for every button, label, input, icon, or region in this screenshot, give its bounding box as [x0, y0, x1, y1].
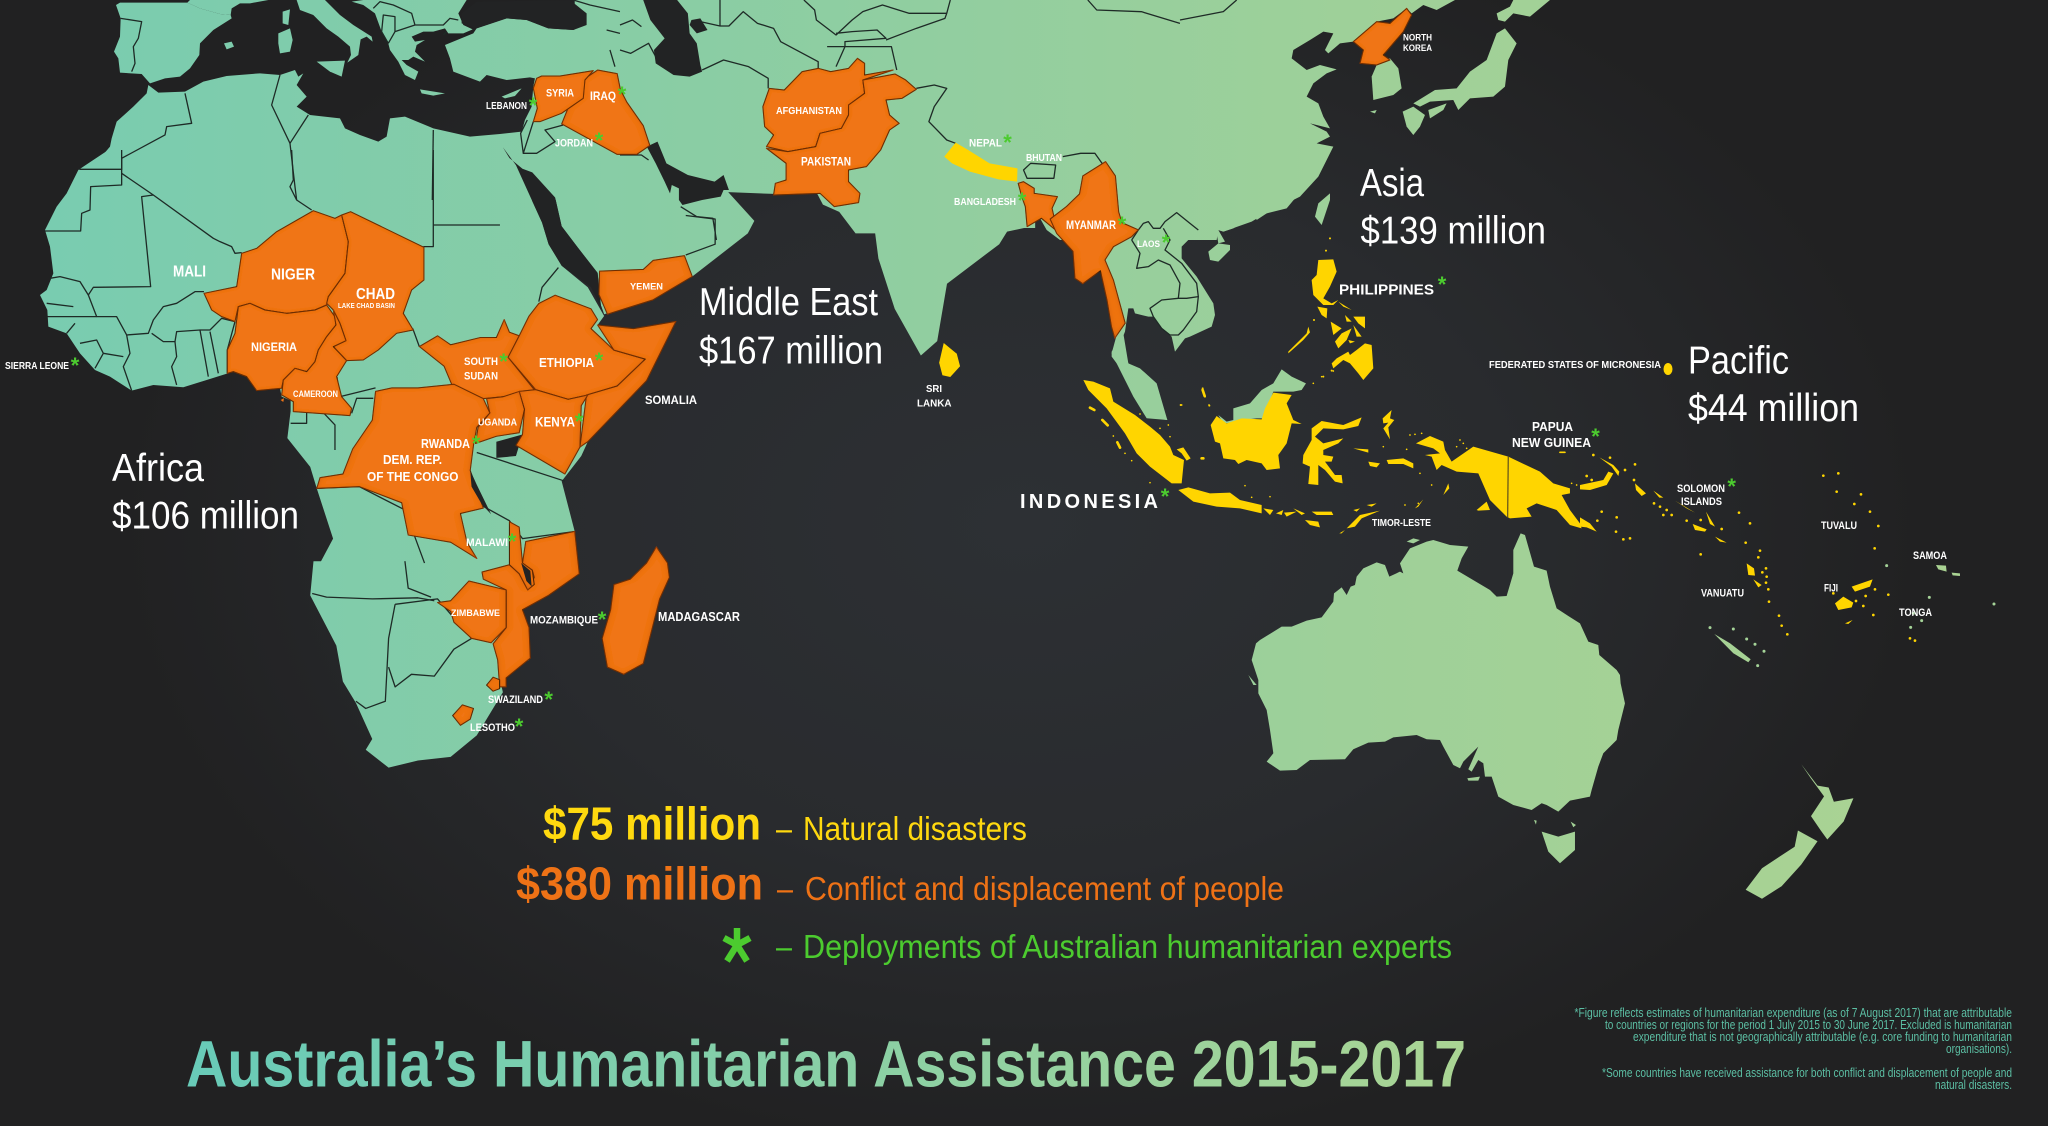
- borders: Mongolia and China: [1180, 0, 1237, 20]
- labels: Middle East: LEBANON: [486, 101, 527, 112]
- sea: Red Sea: [503, 147, 604, 314]
- labels: Africa: [5, 264, 740, 734]
- lake: Tanganyika: [470, 470, 491, 514]
- map: land masses: [40, 0, 1994, 899]
- labels: Africa: SUDAN: [464, 371, 498, 383]
- country: Federated States of Micronesia: [1664, 363, 1672, 375]
- map: deployment asterisks: *: [575, 409, 584, 434]
- footnotes: natural disasters.: [1935, 1078, 2012, 1092]
- labels: Africa: KENYA: [535, 414, 575, 430]
- map: deployment asterisks: *: [1003, 130, 1012, 155]
- map: deployment asterisks: *: [1591, 424, 1600, 449]
- labels: Pacific: FIJI: [1824, 583, 1838, 595]
- labels: Pacific: TUVALU: [1821, 520, 1857, 532]
- map: deployment asterisks: *: [1162, 230, 1171, 255]
- labels: Africa: MALI: [173, 264, 206, 280]
- labels: Africa: NIGERIA: [251, 340, 297, 354]
- icon: large green asterisk: [724, 928, 750, 961]
- labels: Africa: UGANDA: [478, 416, 517, 428]
- labels: Asia: BHUTAN: [1026, 152, 1062, 164]
- region total: Asia: $139 million: [1360, 210, 1546, 252]
- sea: Persian Gulf: [647, 142, 729, 205]
- borders: Indochina: [1132, 213, 1198, 335]
- land: New Zealand: [1746, 764, 1853, 899]
- region total: Africa: Africa: [112, 447, 204, 490]
- labels: Africa: SOUTH: [464, 356, 498, 368]
- borders: Middle East and Central Asia: [620, 0, 1180, 240]
- border: Papua line: [1507, 457, 1509, 517]
- map: natural disaster countries: [939, 143, 1915, 641]
- map: deployment asterisks: *: [598, 607, 607, 632]
- legend: conflict and displacement: –: [777, 870, 794, 907]
- labels: Africa: ZIMBABWE: [451, 608, 500, 619]
- legend: conflict and displacement: $380 million: [516, 858, 763, 910]
- legend: natural disasters: [543, 798, 1027, 850]
- country: Pacific islands: [1580, 455, 1915, 641]
- borders: West Africa: [45, 150, 500, 450]
- footnotes: organisations).: [1946, 1042, 2012, 1056]
- legend: conflict and displacement: [516, 858, 1284, 910]
- sea: Aral Sea: [690, 18, 707, 33]
- map: deployment asterisks: *: [1118, 212, 1127, 237]
- legend: conflict and displacement: Conflict and displacement of people: [805, 870, 1284, 907]
- land: West Africa: [40, 150, 353, 402]
- map: deployment asterisks: *: [508, 529, 517, 554]
- labels: Africa: ETHIOPIA: [539, 355, 595, 370]
- land: China and east Asia: [980, 0, 1455, 240]
- labels: Pacific: NEW GUINEA: [1512, 436, 1591, 450]
- labels: Africa: DEM. REP.: [383, 453, 442, 467]
- legend: expert deployments: –: [776, 928, 793, 965]
- map: deployment asterisks: *: [472, 431, 481, 456]
- labels: Asia: INDONESIA: [1020, 491, 1158, 513]
- labels: Asia: NEPAL: [969, 138, 1002, 150]
- labels: Middle East: JORDAN: [555, 138, 593, 150]
- region total: Middle East: $167 million: [699, 329, 883, 372]
- region total: Africa: $106 million: [112, 495, 299, 538]
- map: deployment asterisks: *: [515, 714, 524, 739]
- lake: Victoria: [496, 435, 522, 458]
- labels: Africa: MALAWI: [466, 537, 508, 549]
- map: deployment asterisks: *: [595, 128, 604, 153]
- country: Sri Lanka: [939, 343, 960, 377]
- map: deployment asterisks: *: [1018, 188, 1027, 213]
- map: country borders: [45, 0, 1237, 708]
- sea: Caspian Sea: [643, 0, 702, 77]
- legend: natural disasters: $75 million: [543, 798, 761, 850]
- borders: central and east Africa: [317, 268, 575, 563]
- country: Indonesia and Papua New Guinea: [1083, 371, 1582, 533]
- legend: expert deployments: Deployments of Australian humanitarian experts: [803, 928, 1452, 965]
- map: deployment asterisks: *: [1438, 272, 1447, 297]
- map: deployment asterisks: *: [1161, 484, 1170, 509]
- labels: Africa: MADAGASCAR: [658, 610, 740, 624]
- land: Hainan: [1208, 243, 1230, 262]
- land: Arabia, Iran, India: [522, 0, 1035, 356]
- land: Malay peninsula and Sabah: [1112, 333, 1306, 423]
- lake: Malawi: [521, 563, 532, 586]
- labels: Asia: MYANMAR: [1066, 220, 1117, 232]
- labels: Pacific: [1489, 359, 1947, 619]
- legend: natural disasters: Natural disasters: [803, 810, 1027, 847]
- labels: Africa: NIGER: [271, 266, 315, 284]
- map: deployment asterisks: *: [618, 82, 627, 107]
- labels: Africa: CAMEROON: [293, 389, 338, 399]
- country: Philippines: [1181, 238, 1373, 406]
- labels: Asia: LAOS: [1137, 239, 1160, 250]
- region total: Pacific: $44 million: [1688, 387, 1859, 430]
- legend: natural disasters: –: [776, 810, 793, 847]
- labels: Africa: MOZAMBIQUE: [530, 614, 598, 626]
- borders: southern Africa: [312, 561, 472, 708]
- countries: southern Africa: [438, 522, 669, 725]
- countries: South Asia: [763, 58, 1057, 232]
- labels: Pacific: PAPUA: [1532, 420, 1573, 434]
- map: deployment asterisks: *: [544, 687, 553, 712]
- footnotes: [1574, 1006, 2012, 1092]
- labels: Asia: BANGLADESH: [954, 197, 1016, 208]
- borders: North Africa and Levant: [121, 0, 620, 200]
- labels: Pacific: SOLOMON: [1677, 483, 1725, 495]
- labels: Middle East: [486, 88, 851, 292]
- labels: Middle East: AFGHANISTAN: [776, 105, 842, 117]
- labels: Pacific: FEDERATED STATES OF MICRONESIA: [1489, 359, 1661, 371]
- labels: Asia: SRI: [926, 384, 942, 395]
- country: North Korea: [1353, 8, 1412, 65]
- labels: Pacific: TONGA: [1899, 607, 1932, 619]
- labels: Pacific: SAMOA: [1913, 550, 1947, 562]
- country: Nepal: [944, 143, 1017, 182]
- labels: Africa: OF THE CONGO: [367, 470, 459, 484]
- country: Syria: [533, 71, 593, 122]
- map: deployment asterisks: *: [595, 348, 604, 373]
- labels: Africa: SOMALIA: [645, 393, 697, 407]
- labels: Asia: LANKA: [917, 398, 952, 410]
- land: Australia: [1248, 533, 1625, 863]
- labels: Middle East: IRAQ: [590, 89, 616, 103]
- map: inland seas and lakes: [462, 0, 729, 458]
- region total: Pacific: [1688, 340, 1859, 430]
- labels: Asia: KOREA: [1403, 43, 1432, 54]
- labels: Pacific: ISLANDS: [1681, 496, 1722, 508]
- labels: Africa: CHAD: [356, 286, 395, 303]
- map: conflict and displacement countries: [204, 8, 1412, 725]
- labels: Middle East: YEMEN: [630, 282, 663, 292]
- countries: other African and Middle East conflict countries: [317, 70, 692, 558]
- labels: Africa: RWANDA: [421, 437, 470, 451]
- land: Indochina and Thailand: [1060, 198, 1295, 420]
- region total: Pacific: Pacific: [1688, 340, 1789, 382]
- region total: Asia: Asia: [1360, 162, 1424, 205]
- labels: Asia: TIMOR-LESTE: [1372, 517, 1431, 529]
- map: deployment asterisks: *: [529, 93, 538, 118]
- labels: Africa: LAKE CHAD BASIN: [338, 301, 395, 310]
- labels: Asia: PHILIPPINES: [1339, 282, 1434, 298]
- borders: Oman and Yemen: [686, 215, 715, 255]
- map: country labels: [5, 33, 1947, 734]
- labels: Asia: [917, 33, 1434, 529]
- map: African lakes over countries: [470, 470, 532, 586]
- region total: Middle East: [699, 281, 883, 372]
- labels: Asia: NORTH: [1403, 33, 1432, 44]
- region total: Asia: [1360, 162, 1546, 252]
- title: Australia’s Humanitarian Assistance 2015-2017: [186, 1027, 1466, 1101]
- labels: Middle East: SYRIA: [546, 88, 574, 100]
- land: Korea, Japan, Taiwan: [1315, 0, 1550, 225]
- map: deployment asterisks: *: [499, 349, 508, 374]
- land: southern Africa: [310, 561, 578, 768]
- labels: Middle East: PAKISTAN: [801, 157, 851, 169]
- map: deployment asterisks: [71, 82, 1736, 739]
- map: deployment asterisks: *: [1727, 474, 1736, 499]
- sea: Black Sea: [462, 0, 587, 30]
- land: Europe and Mediterranean rim: [100, 0, 620, 200]
- labels: Africa: SWAZILAND: [488, 694, 543, 706]
- region total: Middle East: Middle East: [699, 281, 878, 324]
- countries: Niger, Chad, Nigeria, Cameroon: [204, 211, 424, 416]
- land: Africa central: [287, 196, 676, 563]
- land: New Caledonia and Polynesian islands: [1710, 565, 1994, 666]
- labels: Africa: LESOTHO: [470, 722, 515, 734]
- map: deployment asterisks: *: [71, 353, 80, 378]
- labels: Africa: SIERRA LEONE: [5, 361, 69, 372]
- country: Myanmar: [1050, 162, 1138, 338]
- region total: Africa: [112, 447, 299, 538]
- labels: Pacific: VANUATU: [1701, 588, 1744, 600]
